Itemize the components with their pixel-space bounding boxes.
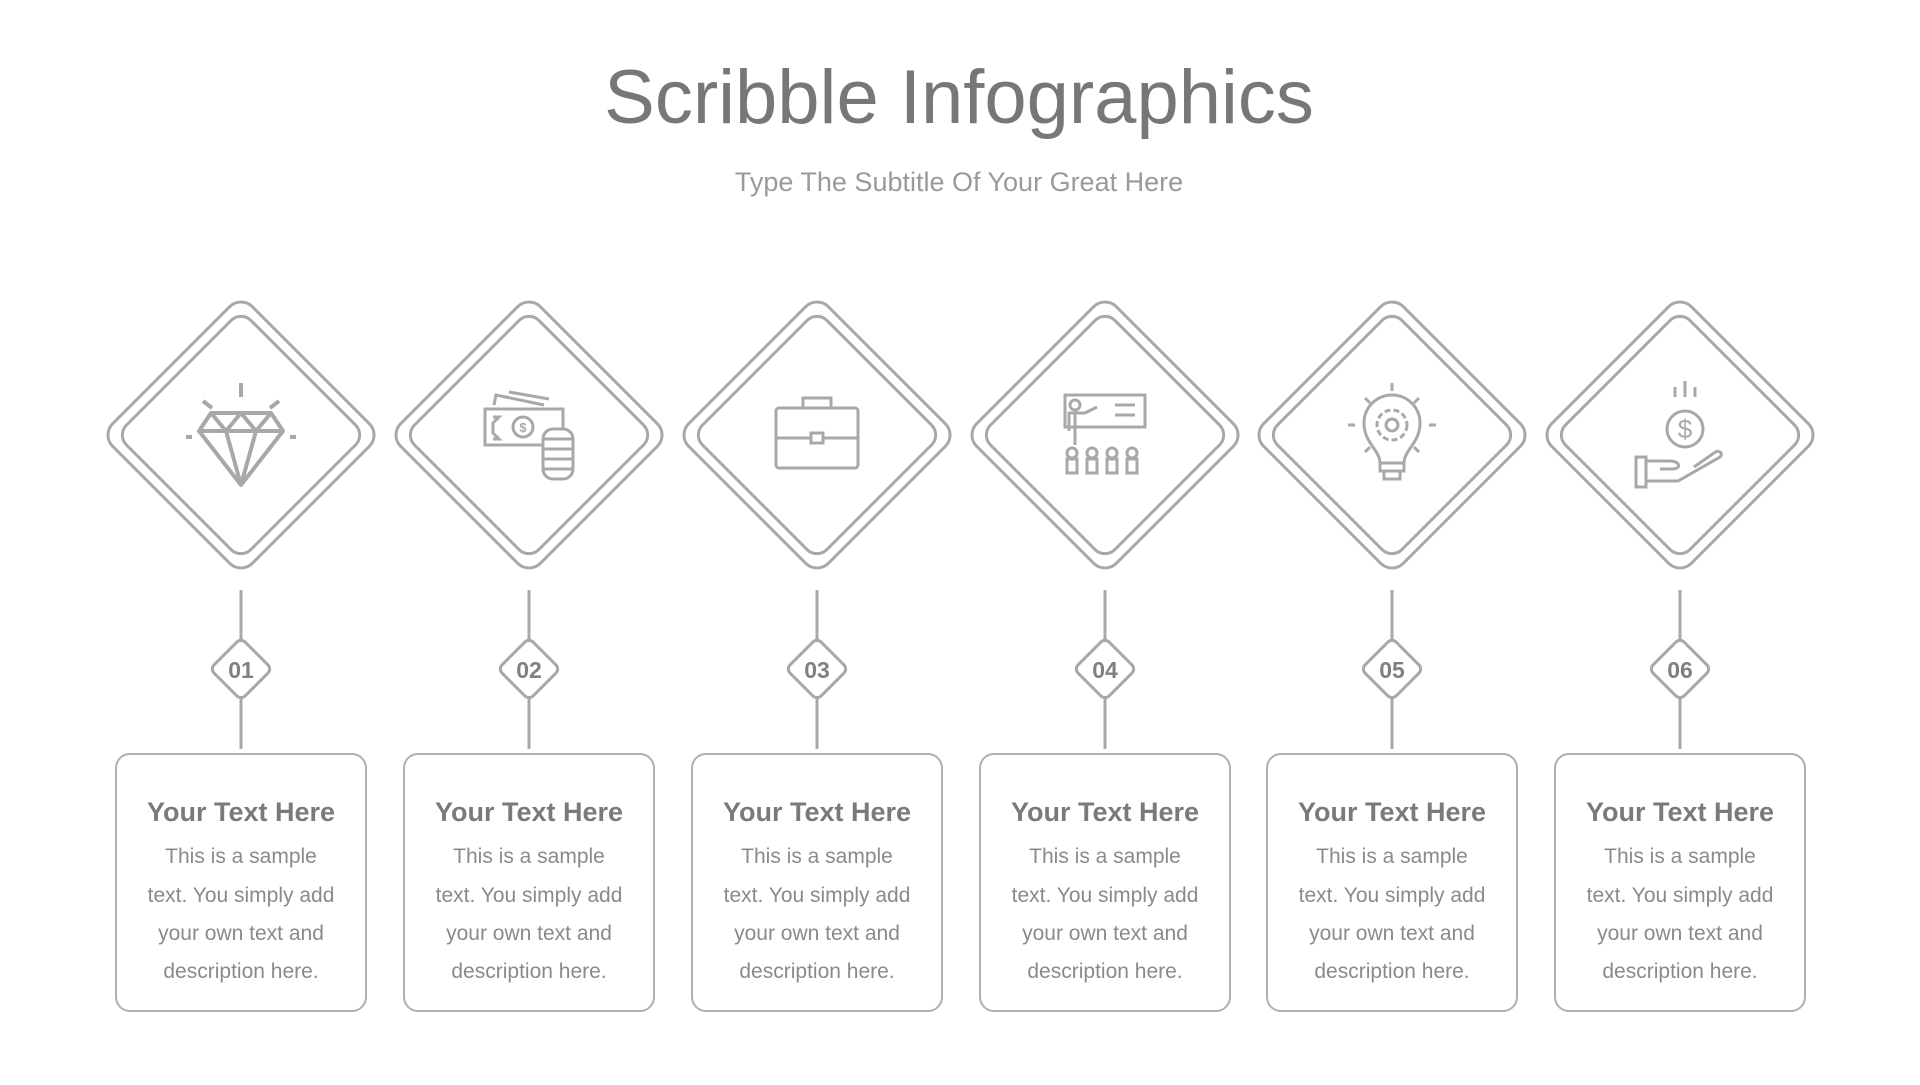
card text 01: Your Text Here (147, 797, 335, 827)
card text 04 (1011, 797, 1199, 983)
icon: hand with coin: $ (1678, 414, 1693, 444)
subtitle: Type The Subtitle Of Your Great Here (735, 167, 1183, 197)
card text 06: text. You simply add (1587, 884, 1773, 907)
icon: money (485, 392, 573, 479)
card text 02: This is a sample (453, 845, 605, 868)
card text 04: Your Text Here (1011, 797, 1199, 827)
step 02 (389, 295, 669, 1011)
card text 05: text. You simply add (1299, 884, 1485, 907)
card text 02: text. You simply add (436, 884, 622, 907)
icon: money: $ (519, 420, 527, 435)
icon: presentation (1065, 395, 1145, 473)
icon: hand with coin (1636, 381, 1721, 487)
label 03: 03 (804, 657, 830, 683)
card text 02: description here. (451, 960, 607, 983)
card text 04: This is a sample (1029, 845, 1181, 868)
step 03 (677, 295, 957, 1011)
card text 06: Your Text Here (1586, 797, 1774, 827)
step 01 (101, 295, 381, 1011)
title: Scribble Infographics (604, 55, 1314, 140)
card text 01 (147, 797, 335, 983)
icon: diamond (186, 383, 296, 485)
card text 03: description here. (739, 960, 895, 983)
step 05 (1252, 295, 1532, 1011)
icon: briefcase (776, 398, 858, 468)
card text 05 (1298, 797, 1486, 983)
card text 03: your own text and (734, 922, 900, 945)
card text 02 (435, 797, 623, 983)
card text 01: text. You simply add (148, 884, 334, 907)
label 06: 06 (1667, 657, 1693, 683)
card text 01: your own text and (158, 922, 324, 945)
card text 06: your own text and (1597, 922, 1763, 945)
card text 02: your own text and (446, 922, 612, 945)
card text 03: text. You simply add (724, 884, 910, 907)
card text 01: This is a sample (165, 845, 317, 868)
card text 05: This is a sample (1316, 845, 1468, 868)
label 02: 02 (516, 657, 542, 683)
card text 06: description here. (1602, 960, 1758, 983)
card text 05: description here. (1314, 960, 1470, 983)
card text 06: This is a sample (1604, 845, 1756, 868)
card text 04: text. You simply add (1012, 884, 1198, 907)
card text 03: Your Text Here (723, 797, 911, 827)
card text 03: This is a sample (741, 845, 893, 868)
card text 05: your own text and (1309, 922, 1475, 945)
card text 03 (723, 797, 911, 983)
card text 05: Your Text Here (1298, 797, 1486, 827)
card text 04: your own text and (1022, 922, 1188, 945)
card text 01: description here. (163, 960, 319, 983)
icon: lightbulb gear (1348, 383, 1436, 479)
step 04 (965, 295, 1245, 1011)
card text 02: Your Text Here (435, 797, 623, 827)
step 06 (1540, 295, 1820, 1011)
card text 04: description here. (1027, 960, 1183, 983)
label 05: 05 (1379, 657, 1405, 683)
label 04: 04 (1092, 657, 1118, 683)
label 01: 01 (228, 657, 254, 683)
card text 06 (1586, 797, 1774, 983)
